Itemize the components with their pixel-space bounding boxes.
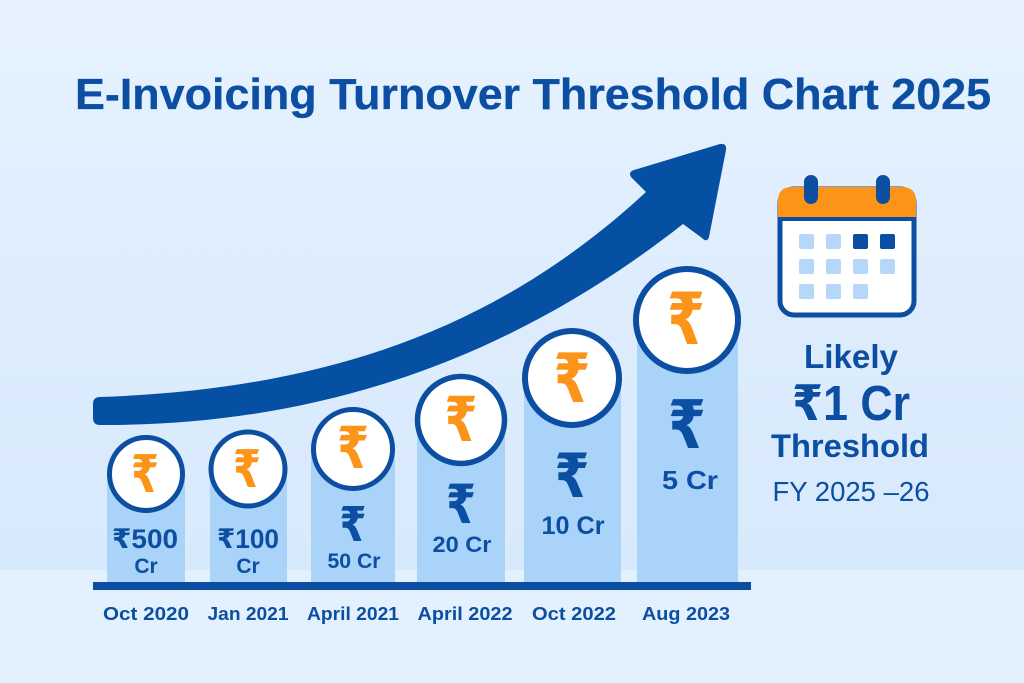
bar: Jan 2021 [210,432,287,582]
bar: Oct 2020 [107,438,185,582]
callout: likely threshold: FY 2025 –26 [772,476,930,507]
bar: Oct 2022 [524,331,621,582]
bar: Aug 2023: 5 Cr [662,465,718,495]
bar: April 2021: ₹ [340,499,366,552]
callout: likely threshold: Likely [804,338,899,375]
bar: Aug 2023 [636,269,738,582]
chart: threshold bars [93,269,751,590]
bar: April 2021 [311,410,395,582]
bar: Oct 2022: 10 Cr [542,512,605,540]
bar: April 2022 [417,376,505,582]
bar: Oct 2022: ₹ [554,442,590,510]
title: E-Invoicing Turnover Threshold Chart 2025 [75,70,991,119]
bar: Jan 2021: ₹ [233,441,261,499]
callout: likely threshold: Threshold [771,428,929,464]
bar: April 2021: ₹ [337,416,369,481]
date labels: April 2021 [307,603,399,624]
callout: likely threshold: ₹1 Cr [792,377,910,431]
bar: Oct 2020: ₹500 [112,524,178,554]
date labels: Oct 2022 [532,603,616,624]
date labels: Jan 2021 [208,603,288,624]
bar: Jan 2021: ₹100 [217,524,279,554]
bar: April 2022: 20 Cr [432,532,492,557]
callout: likely threshold [771,338,930,507]
bar: Aug 2023: ₹ [668,388,706,463]
bar: Aug 2023: ₹ [667,280,705,360]
bar: April 2021: 50 Cr [328,550,380,573]
date labels: April 2022 [418,603,512,624]
icon: calendar [778,175,916,315]
bar: Oct 2020: ₹ [131,446,159,504]
date labels: Aug 2023 [642,603,730,624]
bar: April 2022: ₹ [444,386,478,455]
bar: Oct 2020: Cr [134,555,158,578]
bar: Oct 2022: ₹ [554,341,590,417]
date labels: Oct 2020 [103,603,189,624]
bar: April 2022: ₹ [446,475,476,535]
axis line [93,582,751,590]
bar: Jan 2021: Cr [236,555,260,578]
date labels [103,603,730,624]
growth arrow [93,144,726,425]
